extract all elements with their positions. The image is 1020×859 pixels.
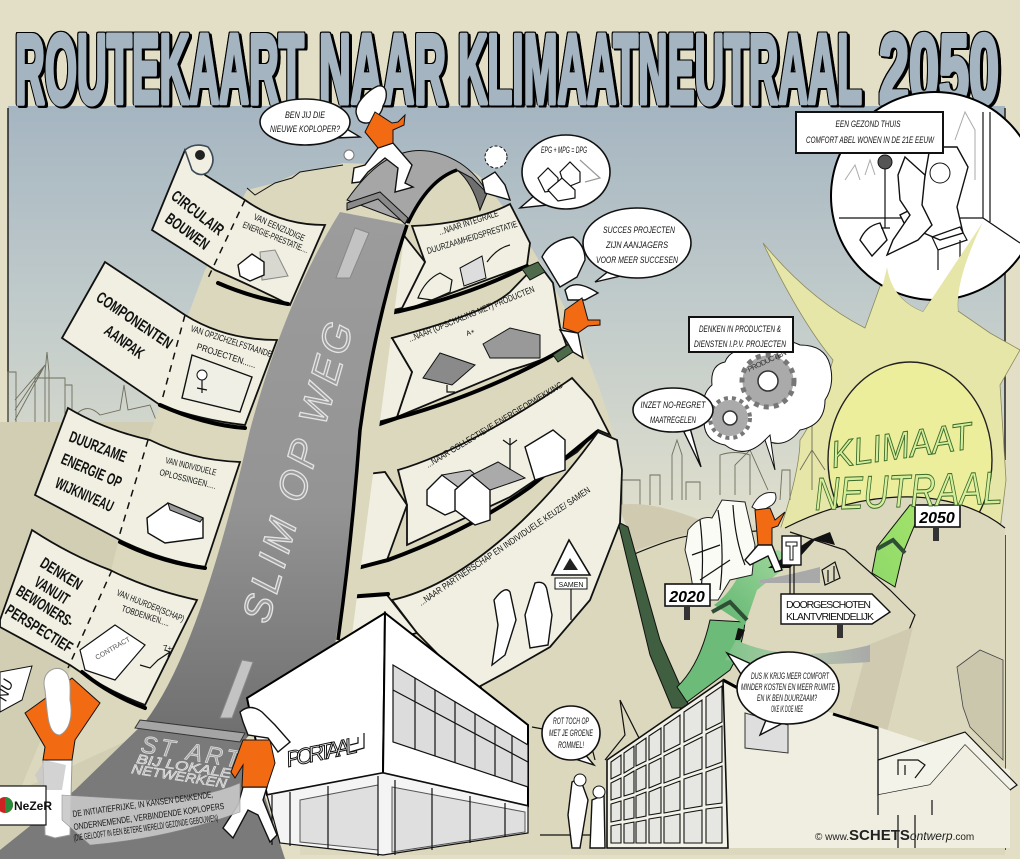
- sign: t crossing: [782, 536, 801, 595]
- logo: nezer: [0, 786, 52, 825]
- vision circle: comfort at home: [796, 92, 1020, 300]
- route upper: [714, 550, 795, 625]
- bubble: succes projecten: VOOR MEER SUCCESEN: [596, 255, 678, 266]
- person: climbing crowd: [685, 500, 755, 600]
- icon: contract: 7+: [163, 644, 172, 653]
- divider: [162, 315, 185, 400]
- side piece: [348, 472, 407, 570]
- text: OPLOSSINGEN.....: [159, 467, 217, 491]
- left tower hill: [20, 163, 405, 790]
- bubble: ben jij die: BEN JIJ DIE: [285, 110, 325, 121]
- building: portaal: [247, 613, 528, 856]
- person: nu figure: [25, 668, 100, 838]
- panel: denken vanuit bewonersperspectief: [0, 530, 197, 708]
- text: VAN INDIVIDUELE: [165, 455, 217, 478]
- icon: work sign: SAMEN: [559, 582, 583, 589]
- bubble: epg mpg dpg: [520, 135, 610, 209]
- heading: VANUIT: [31, 574, 72, 609]
- legs: [352, 143, 413, 192]
- side piece: [380, 233, 425, 313]
- bubble: dus ik krijg: DUS IK KRIJG MEER COMFORT: [751, 671, 830, 682]
- person legs and paper: [887, 157, 932, 255]
- branch upper: [760, 567, 820, 583]
- logo mark: [350, 733, 364, 752]
- icon: row houses: [427, 430, 565, 525]
- side piece: [370, 338, 412, 424]
- bubble: epg mpg dpg: EPG + MPG = DPG: [541, 145, 587, 156]
- right band 1: [380, 204, 530, 315]
- torso and arms: [25, 678, 100, 760]
- text: ENERGIE-PRESTATIE....: [241, 220, 310, 255]
- bubble: dus ik krijg: MINDER KOSTEN EN MEER RUIMTE: [741, 682, 835, 693]
- road main: [145, 212, 407, 745]
- icon: house: [147, 503, 203, 543]
- green route 2050: [872, 505, 923, 587]
- trees behind right building: [532, 700, 640, 835]
- heading: BEWONERS-: [13, 583, 76, 631]
- grass outline: [247, 165, 343, 195]
- icon: wind turbines: [503, 438, 517, 470]
- right band 4: [335, 432, 622, 691]
- label: klimaat neutraal: KLIMAAT: [828, 415, 977, 477]
- banner: koplopers: DE INITIATIEFRIJKE, IN KANSEN DENKENDE,: [72, 789, 214, 819]
- edge: [347, 594, 388, 597]
- hair: [44, 668, 71, 735]
- bubble: dus ik krijg: [727, 652, 839, 735]
- gear small: [712, 400, 748, 436]
- bubble: succes projecten: [583, 208, 691, 282]
- person: einstein figure: [482, 146, 510, 200]
- route lower: [677, 620, 745, 702]
- torso: [231, 740, 275, 787]
- lamp: [881, 168, 890, 228]
- hair: [356, 86, 386, 123]
- green route 2020: [677, 532, 870, 702]
- icon: map with pin: [182, 355, 252, 412]
- road: [0, 151, 487, 859]
- bubble: no-regret: INZET NO-REGRET: [640, 400, 706, 411]
- house lines: [878, 727, 932, 848]
- icon: map and window: [418, 245, 510, 300]
- bottom edge: [82, 672, 145, 708]
- thought cloud with gears: [704, 341, 832, 470]
- skyline left: [8, 352, 158, 425]
- text: VAN EENZIJDIGE: [252, 212, 306, 243]
- box: denken in producten: DENKEN IN PRODUCTEN &: [699, 324, 781, 335]
- gear large: [744, 357, 792, 405]
- panel: circulair bouwen: [152, 145, 325, 305]
- bottom edge: [218, 283, 288, 304]
- road shadow: [457, 170, 487, 210]
- text: PROJECTEN......: [195, 341, 257, 370]
- icon: houses: [538, 160, 600, 201]
- title: [15, 14, 999, 124]
- heading: PERSPECTIEF: [2, 602, 75, 657]
- ground left: [0, 422, 200, 859]
- torso: [365, 112, 405, 148]
- bubble: no-regret: [633, 388, 713, 467]
- big hill right: [600, 497, 1005, 855]
- lower ground: [300, 550, 1005, 855]
- icon: building blocks on hill: [822, 562, 840, 585]
- heading: DUURZAME: [67, 429, 129, 466]
- box: denken in producten: [689, 317, 793, 352]
- bubble: rot toch op: ROT TOCH OP: [553, 716, 589, 727]
- right band 3: [348, 378, 610, 570]
- hill ridge outline: [632, 497, 1005, 650]
- person: orange climber: [745, 493, 785, 572]
- bubble: dus ik krijg: OKE IK DOE MEE: [771, 704, 803, 715]
- side table: [932, 227, 967, 270]
- icon: contract: [80, 625, 172, 680]
- panel: componenten aanpak: [62, 262, 277, 428]
- bottom edge: [120, 542, 205, 568]
- cloud: [704, 341, 832, 451]
- copyright: © www.SCHETSontwerp.com: [815, 827, 974, 844]
- person: start walker: [223, 708, 290, 842]
- dark green strip: [618, 522, 690, 708]
- side window: [745, 713, 788, 753]
- icon: contract: CONTRACT: [94, 636, 132, 662]
- chair: [900, 147, 968, 240]
- logo: nezer: NeZeR: [14, 799, 52, 813]
- edge: [350, 432, 597, 570]
- sign: 2020: [665, 584, 710, 620]
- sign: doorgeschoten klantvriendelijk: KLANTVRIENDELIJK: [786, 611, 874, 623]
- divider: [208, 200, 245, 278]
- columns: [272, 776, 505, 856]
- heading: ENERGIE OP: [58, 451, 124, 492]
- smoke: [345, 143, 370, 156]
- hair: [240, 708, 290, 752]
- divider: [118, 440, 148, 540]
- bubble: rot toch op: [542, 706, 600, 765]
- person: top runner: [344, 86, 413, 192]
- label: EEN GEZOND THUIS: [836, 119, 901, 130]
- building: right flat: [607, 680, 1017, 848]
- front facade: [607, 680, 728, 848]
- window grid: [611, 686, 722, 843]
- chevron: [712, 602, 747, 620]
- side facade: [723, 680, 1010, 848]
- edge: [368, 345, 570, 428]
- top plate: [347, 192, 408, 224]
- sign: 2020: 2020: [668, 589, 705, 606]
- sign: doorgeschoten klantvriendelijk: DOORGESCHOTEN: [786, 599, 871, 611]
- sign: 2050: 2050: [918, 510, 955, 527]
- left facade: [247, 613, 385, 795]
- far hill: [618, 504, 790, 570]
- bubble: ben jij die: NIEUWE KOPLOPER?: [270, 124, 341, 135]
- title: NAAR: [319, 14, 446, 124]
- window mullions: [393, 678, 528, 782]
- start label: NETWERKEN: [131, 761, 228, 791]
- sign: 2050: [915, 505, 960, 541]
- label: COMFORT ABEL WONEN IN DE 21E EEUW: [806, 135, 935, 146]
- text: ...NAAR COLLECTIEVE ENERGIEOPWEKKING: [424, 380, 564, 470]
- panel: duurzame energie op wijkniveau: [35, 408, 240, 568]
- box: denken in producten: DIENSTEN I.P.V. PROJECTEN: [694, 339, 786, 350]
- skyline right: [622, 425, 825, 505]
- person: opposing residents: [568, 774, 605, 848]
- text: ...NAAR (OPSCHALING MET) PRODUCTEN: [407, 284, 536, 344]
- road label: SLIM OP WEG: [234, 317, 362, 627]
- start label: ST ART: [139, 731, 244, 774]
- heading: WIJKNIVEAU: [52, 475, 116, 516]
- right facade: [383, 613, 528, 806]
- roof line: [723, 680, 878, 728]
- burst rays over circle: [868, 222, 983, 330]
- sky: [8, 106, 1005, 526]
- banner: koplopers: ONDERNEMENDE, VERBINDENDE KOPLOPERS: [73, 801, 225, 832]
- lane marks: [220, 228, 369, 718]
- sun burst: [763, 222, 1020, 530]
- road arc top: [347, 151, 487, 223]
- scroll: [185, 145, 213, 175]
- text: ...NAAR PARTNERSCHAP EN INDIVIDUELE KEUZE/ SAMEN: [417, 485, 592, 608]
- edge: [473, 688, 480, 691]
- dome behind right bands: [330, 168, 622, 695]
- sign: doorgeschoten klantvriendelijk: [781, 594, 890, 638]
- bubble: dus ik krijg: EN IK BEN DUURZAAM?: [757, 693, 817, 704]
- house roof: [878, 732, 1017, 795]
- bubble: succes projecten: SUCCES PROJECTEN: [603, 225, 675, 236]
- banner: koplopers: [62, 783, 240, 845]
- edge: [380, 266, 527, 315]
- icon: solar house: A+: [465, 328, 476, 338]
- text: ...NAAR INTEGRALE: [438, 208, 500, 237]
- legs: [43, 760, 72, 838]
- bubble: rot toch op: MET JE GROENE: [549, 728, 593, 739]
- text: VAN HUURDER(SCHAP): [115, 588, 186, 624]
- green trim: [522, 262, 576, 362]
- text: VAN OPZICHZELFSTAANDE: [189, 323, 273, 359]
- rock right: [957, 650, 1003, 760]
- transparent legs: [35, 760, 66, 790]
- heading: AANPAK: [101, 322, 147, 363]
- cliff shadow: [845, 627, 913, 790]
- divider: [68, 570, 112, 668]
- banner: koplopers: (DIE GELOOFT IN EEN BETERE WERELD/ GEZONDE GEBOUWEN): [73, 813, 219, 843]
- text: TOBDENKEN.....: [120, 603, 171, 628]
- ground floor: [267, 773, 528, 855]
- start band: [135, 720, 245, 742]
- legs: [560, 330, 583, 358]
- label: [796, 112, 943, 153]
- glass band: [393, 665, 528, 787]
- road start section: [0, 722, 285, 859]
- person: second runner: [542, 237, 600, 358]
- bubble: rot toch op: ROMMEL!: [558, 740, 584, 751]
- tv: [860, 223, 887, 256]
- icon: house with stairs: [238, 250, 288, 281]
- shop panels: [300, 785, 525, 852]
- sun: [828, 362, 992, 558]
- icon: solar house: [423, 328, 540, 392]
- heading: CIRCULAIR: [168, 188, 227, 240]
- legs: [223, 787, 277, 842]
- tail: [765, 435, 775, 470]
- hair: [565, 285, 598, 300]
- heading: BOUWEN: [162, 210, 212, 254]
- right band 2: [368, 262, 576, 428]
- torso: [563, 298, 600, 333]
- branch lower: [725, 640, 870, 665]
- sign portaal: PORTAAL: [284, 732, 359, 772]
- black road shadow: [735, 532, 835, 640]
- house body: [878, 745, 1010, 848]
- text: DUURZAAMHEIDSPRESTATIE: [426, 219, 518, 256]
- chevron: [877, 540, 905, 553]
- bubble: succes projecten: ZIJN AANJAGERS: [605, 240, 669, 251]
- skyline in window: [845, 112, 975, 180]
- colleagues: [542, 237, 585, 287]
- start label: [131, 731, 244, 791]
- bubble: no-regret: MAATREGELEN: [650, 415, 696, 426]
- arch dark edge: [408, 170, 457, 223]
- thought cloud with gears: PRODUCTEN: [746, 348, 788, 374]
- road edge black: [338, 225, 407, 640]
- people: handshake: [492, 582, 552, 665]
- window frame: [839, 112, 1020, 243]
- side piece: [335, 595, 417, 640]
- heading: COMPONENTEN: [93, 289, 175, 353]
- label: klimaat neutraal: [814, 415, 1003, 520]
- bubble: ben jij die: [260, 99, 360, 145]
- icon: work sign: [552, 540, 590, 620]
- head: [930, 163, 950, 183]
- start label: BIJ LOKALE: [136, 751, 233, 781]
- title: ROUTEKAART: [15, 14, 304, 124]
- heading: DENKEN: [37, 555, 85, 594]
- sign: nu: [0, 666, 32, 712]
- bottom edge: [160, 405, 245, 428]
